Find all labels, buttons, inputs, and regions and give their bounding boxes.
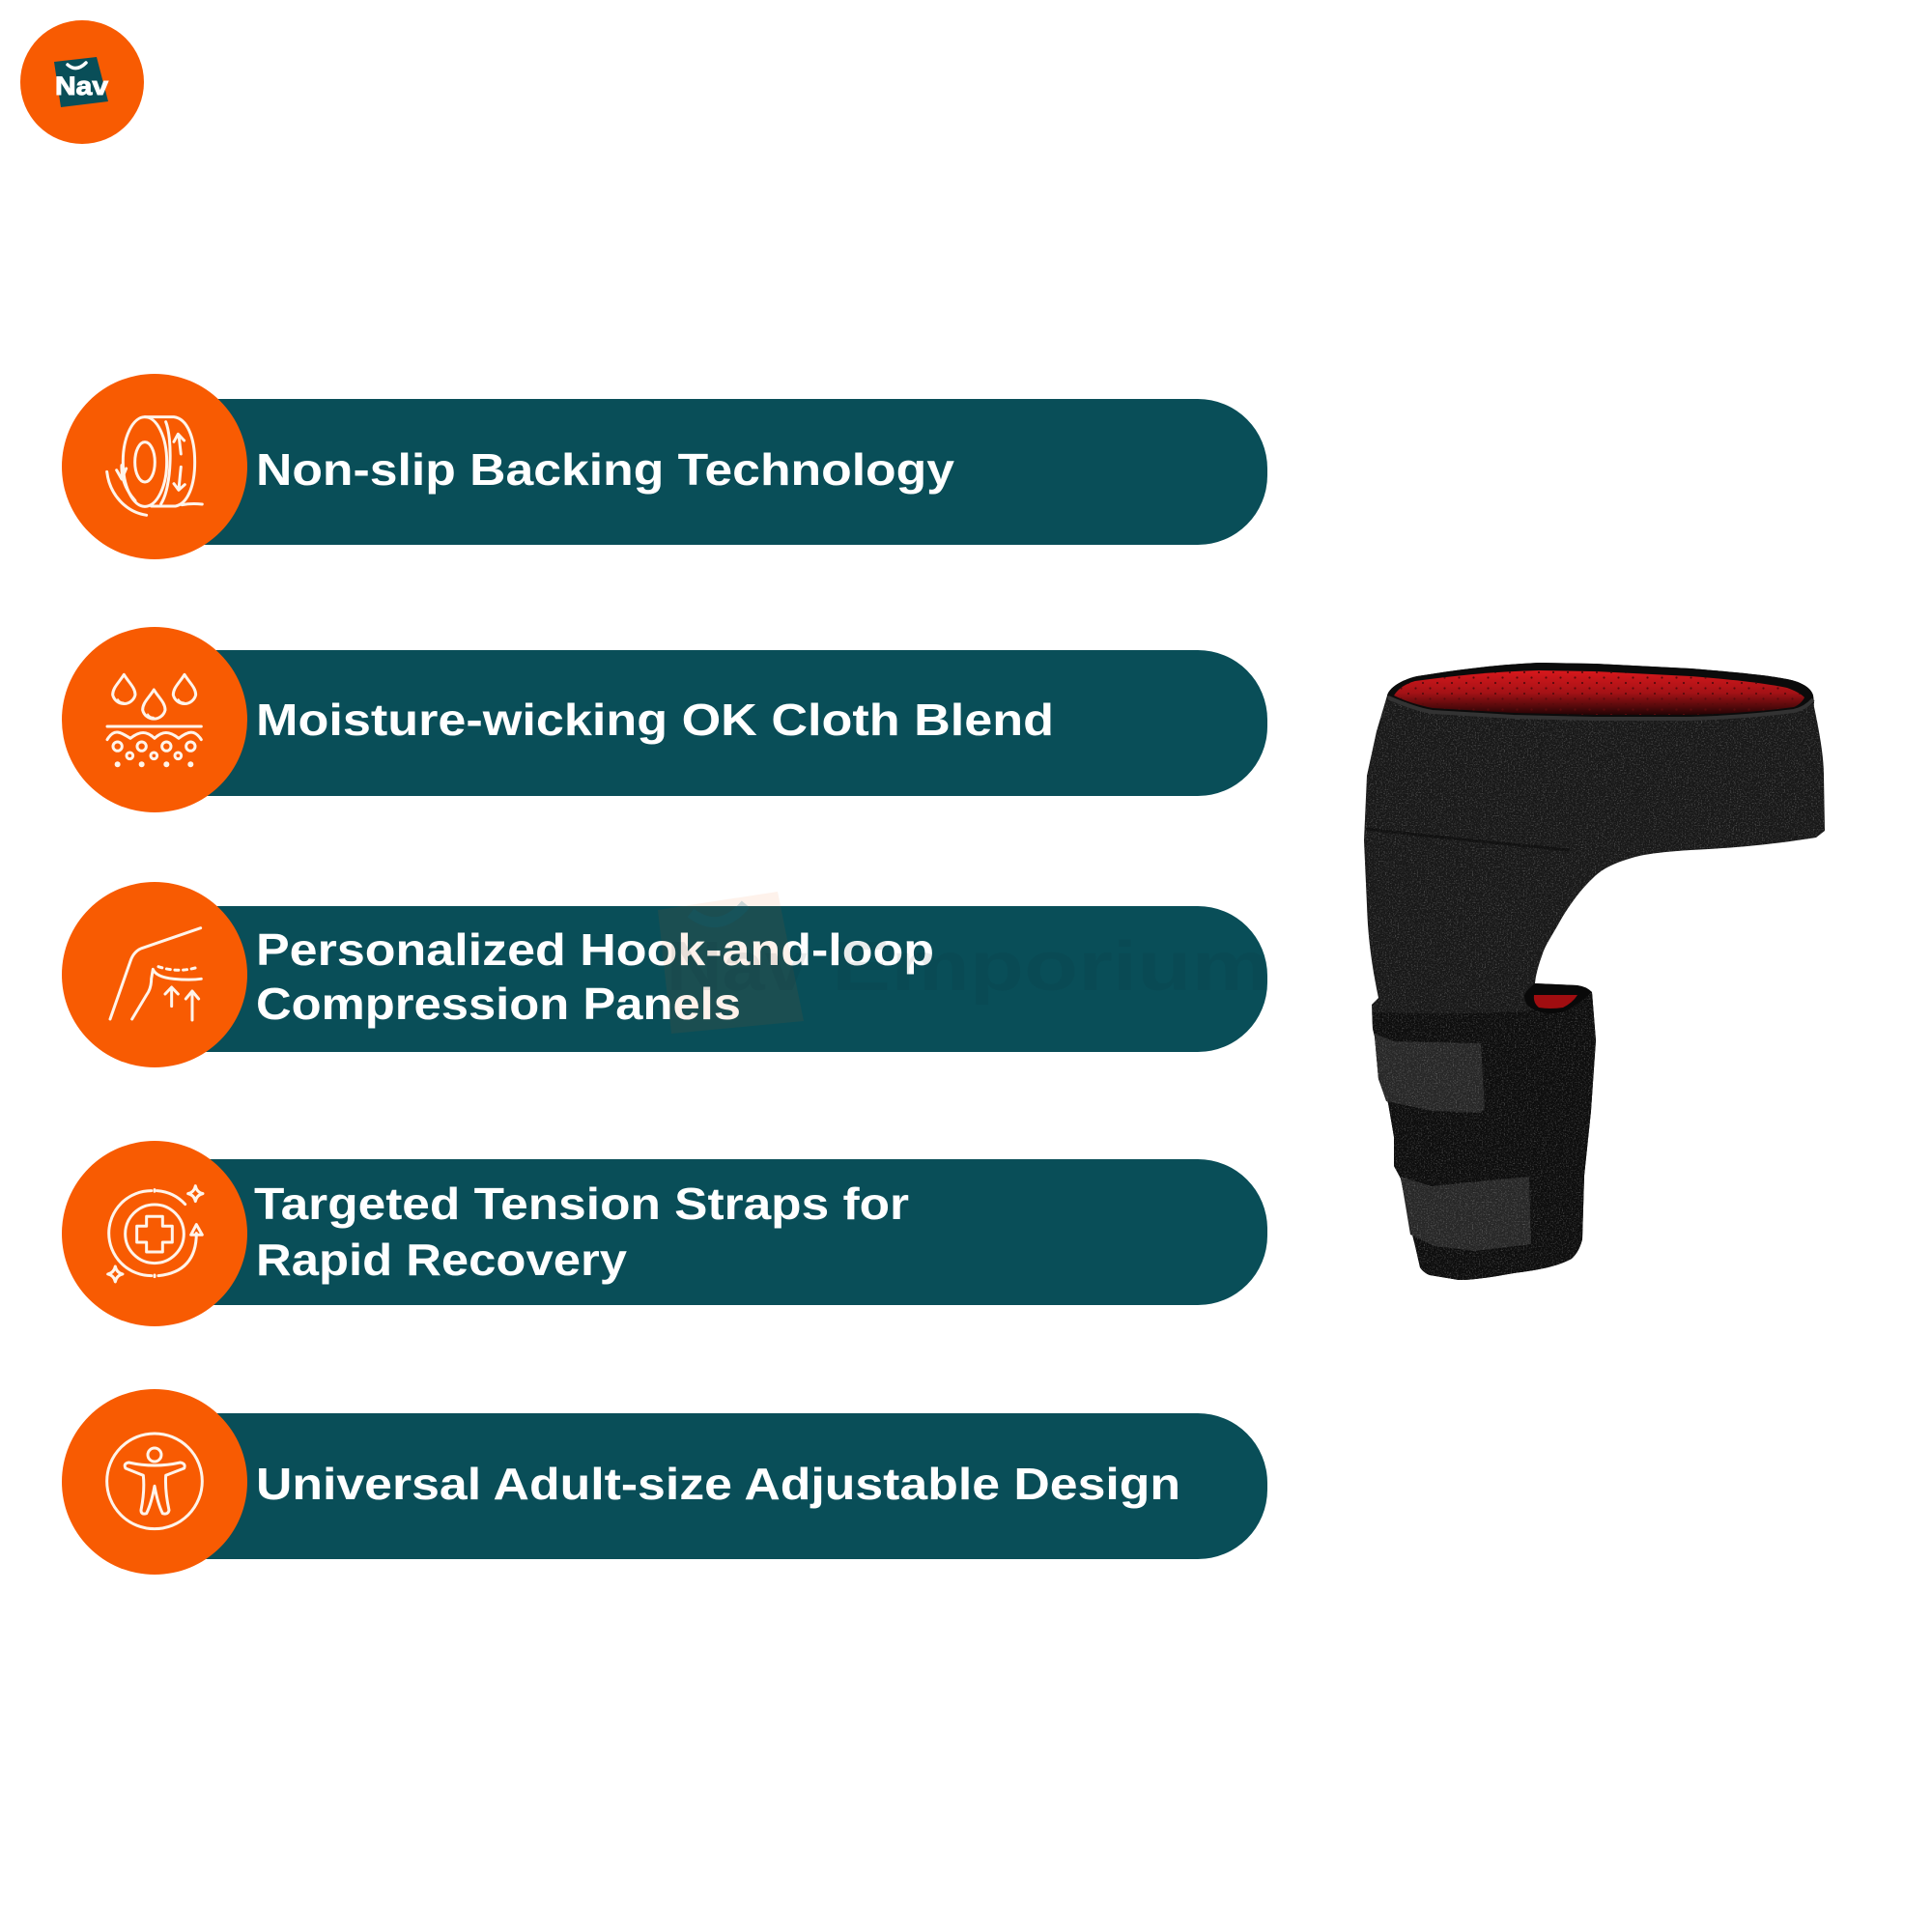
icon circle (62, 1389, 247, 1575)
product photo: thigh and hip brace (1357, 657, 1831, 1294)
waistband edge (1388, 697, 1813, 719)
icon: tape roll (107, 417, 202, 515)
feature row: adjustable design (62, 1389, 1267, 1575)
logo smile (68, 63, 86, 69)
icon: medical cross with ring (108, 1186, 203, 1282)
feature row: non-slip backing (62, 374, 1267, 559)
red inner lining top (1387, 663, 1814, 719)
logo badge (20, 20, 144, 144)
label (256, 924, 934, 1029)
label: Moisture-wicking OK Cloth Blend (256, 695, 1054, 745)
label: Compression Panels (256, 979, 741, 1029)
icon: drops over skin (107, 674, 201, 767)
label: Non-slip Backing Technology (256, 444, 954, 495)
logo bag shape (54, 57, 108, 107)
brace body (1364, 663, 1825, 1280)
lower opening (1524, 983, 1592, 1013)
logo wordmark: Nav (55, 71, 108, 100)
pill (97, 1159, 1267, 1305)
icon circle (62, 627, 247, 812)
pill (97, 650, 1267, 796)
feature row: moisture-wicking (62, 627, 1267, 812)
icon circle (62, 374, 247, 559)
pill (97, 1413, 1267, 1559)
feature row: tension straps (62, 1141, 1267, 1326)
fold line (1366, 829, 1570, 850)
pill (97, 906, 1267, 1052)
fabric speckle (1357, 657, 1831, 1285)
icon: person in circle (107, 1434, 202, 1529)
strap two (1401, 1177, 1531, 1251)
icon: knee with lift arrows (110, 928, 201, 1020)
label: Personalized Hook-and-loop (256, 924, 934, 975)
feature row: compression panels (62, 882, 1267, 1067)
label: Universal Adult-size Adjustable Design (256, 1459, 1180, 1509)
watermark: Nav Emporium: Nav (667, 928, 808, 1006)
icon circle (62, 1141, 247, 1326)
lower sleeve shading (1372, 993, 1596, 1280)
pill (97, 399, 1267, 545)
label: Targeted Tension Straps for (254, 1179, 909, 1229)
icon circle (62, 882, 247, 1067)
watermark: Nav Emporium: Emporium (832, 928, 1270, 1006)
watermark: Nav Emporium (658, 892, 1270, 1034)
label (254, 1179, 909, 1285)
strap one (1375, 1034, 1485, 1113)
label: Rapid Recovery (256, 1235, 627, 1285)
